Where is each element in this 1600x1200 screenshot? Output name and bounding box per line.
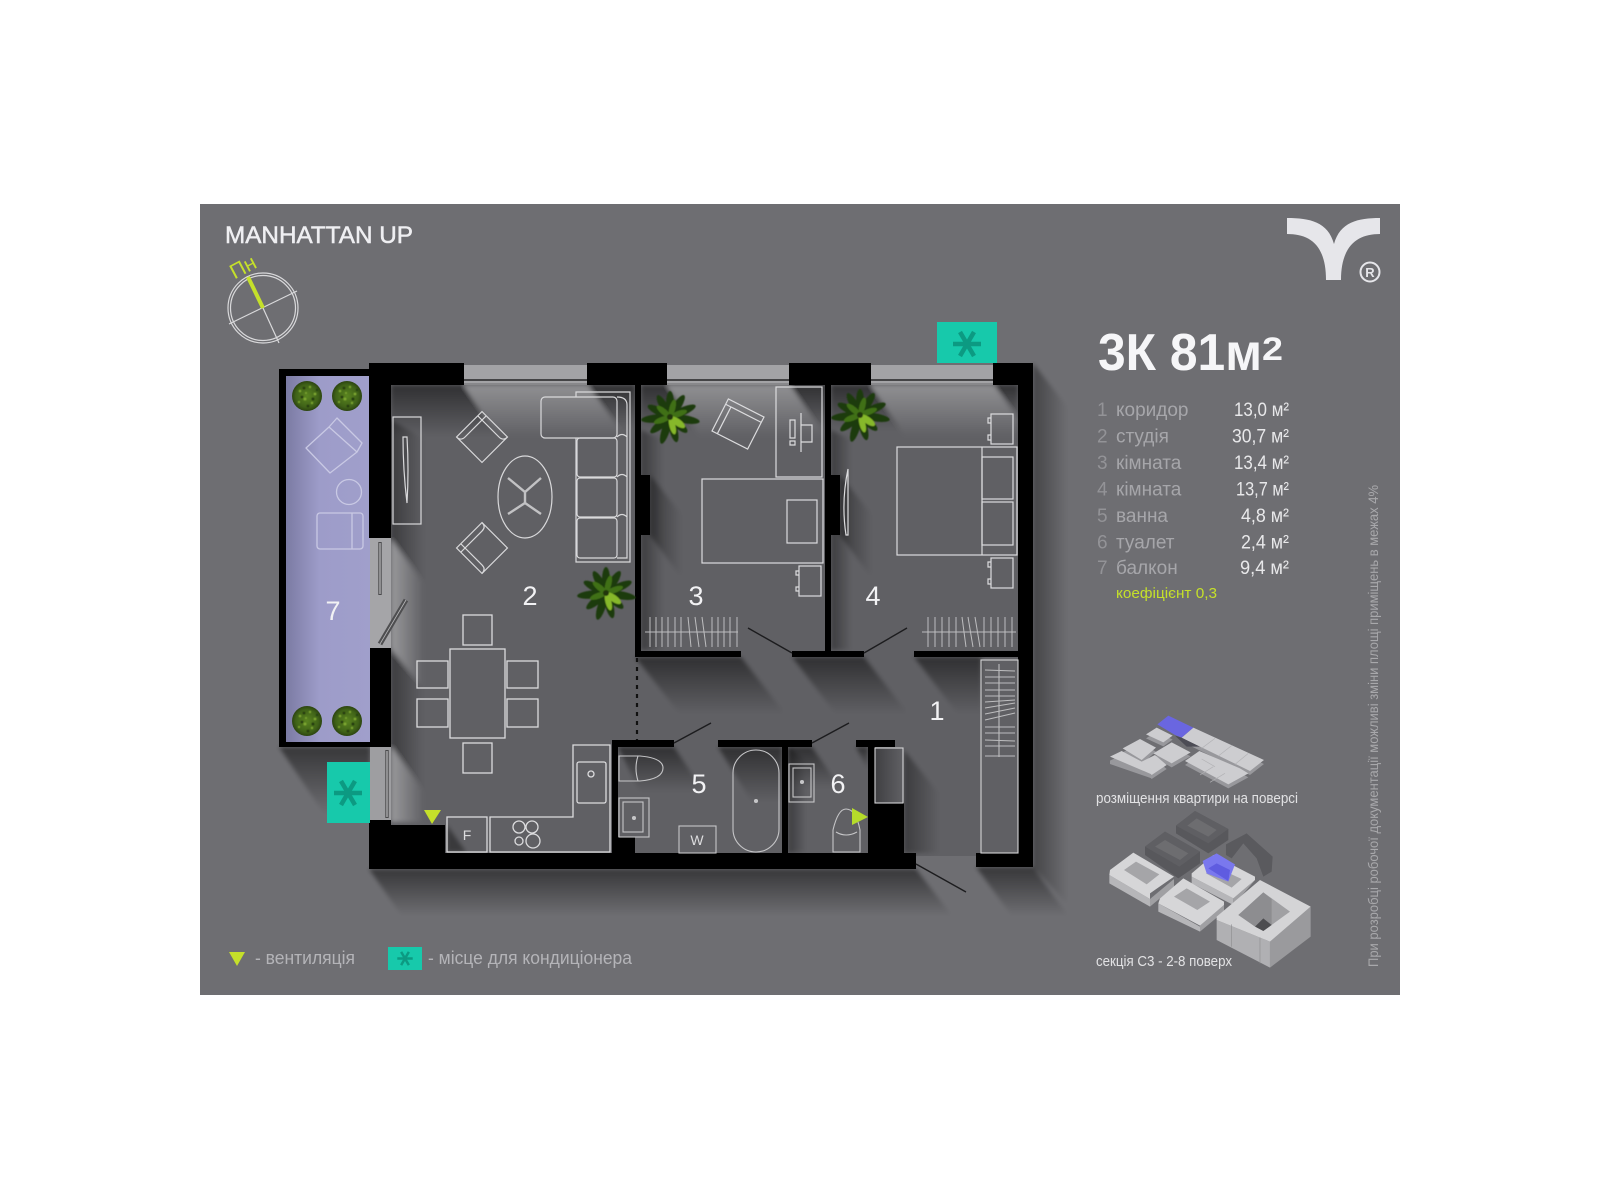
furniture: room 3 [645,387,823,647]
exterior wall shadows [279,363,1068,916]
table values: 2,4 м² [1241,532,1289,554]
table names: коридор [1116,400,1188,421]
icon: air conditioner top [937,322,997,363]
table values: 9,4 м² [1240,558,1289,579]
legend: air conditioner icon [388,947,422,970]
table numbers: 3 [1097,453,1108,474]
furniture: studio living area [393,392,630,573]
room numbers: 6 [830,769,846,799]
windows [370,365,993,820]
table names [1116,400,1188,579]
walls [279,363,1033,869]
table values: 13,0 м² [1234,400,1289,421]
table values: 13,7 м² [1236,480,1289,500]
building 3 [1192,853,1255,905]
plants: balcony [292,381,362,736]
area table [1097,400,1289,579]
room numbers [325,581,945,799]
vertical note: При розробці робочої документації можливі зміни площі приміщень в межах 4% [1366,485,1381,967]
plants: rooms [577,389,890,621]
table values [1232,400,1289,579]
table names: кімната [1116,453,1182,474]
icon: air conditioner left [327,762,370,823]
legend: ventilation text: - вентиляція [255,948,355,968]
compass: Пн [226,251,260,284]
doors and partition [637,628,966,892]
floor location caption: розміщення квартири на поверсі [1096,791,1298,807]
rear buildings [1145,811,1273,878]
room numbers: 2 [522,581,538,611]
legend: ventilation icon [229,952,245,966]
room numbers: 4 [865,581,881,611]
legend [229,947,633,970]
table names: балкон [1116,558,1178,579]
compass [226,251,298,343]
room numbers: 5 [691,769,707,799]
icon: ventilation kitchen [424,810,441,824]
table values: 4,8 м² [1241,506,1289,527]
background panel [200,204,1400,995]
apartment floor [385,380,1021,856]
table names: ванна [1116,506,1168,527]
table numbers: 6 [1097,532,1108,554]
furniture: hall wardrobe and closet [875,660,1018,853]
table values: 13,4 м² [1234,453,1289,474]
table numbers: 5 [1097,506,1108,527]
logo [1287,218,1380,282]
table numbers: 7 [1097,558,1108,579]
floor plan [279,363,1033,892]
building 1 [1109,853,1174,907]
furniture: room 4 [844,414,1017,647]
room numbers: 7 [325,596,341,626]
table numbers: 1 [1097,400,1108,421]
front building [1217,880,1311,968]
label: fridge: F [463,827,471,843]
furniture: dining and kitchen [417,615,610,852]
table numbers: 2 [1097,426,1108,448]
table numbers: 4 [1097,480,1108,500]
building 2 [1158,878,1224,932]
section diagram [1109,811,1311,968]
table numbers [1097,400,1108,579]
room numbers: 3 [688,581,704,611]
balcony floor [286,376,370,742]
furniture: bathroom [619,750,860,853]
title: MANHATTAN UP [225,222,413,249]
furniture: balcony [306,418,363,549]
label: washer: W [690,832,704,848]
section caption: секція С3 - 2-8 поверх [1096,954,1233,970]
room shadows and window light [391,385,1018,853]
heading: 3К 81м [1098,324,1262,382]
floor location diagram [1110,716,1264,788]
table names: туалет [1116,532,1175,554]
table names: студія [1116,426,1169,448]
legend: air conditioner text: - місце для кондиціонера [428,948,633,968]
heading: 2 [1262,331,1283,367]
icon: ventilation toilet [852,808,868,825]
room numbers: 1 [929,696,945,726]
balcony coefficient: коефіцієнт 0,3 [1116,585,1217,602]
table names: кімната [1116,480,1182,500]
logo: R [1365,265,1375,280]
table values: 30,7 м² [1232,426,1289,448]
